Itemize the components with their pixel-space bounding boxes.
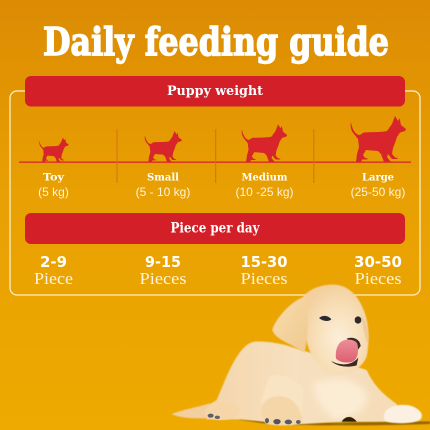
column: large [351,116,406,199]
amount: small: Pieces [140,269,186,288]
ear left [272,297,308,353]
column: medium: (10 -25 kg) [235,185,294,199]
column: small [136,131,190,199]
eye left [319,316,331,321]
amount: medium: 15-30 [240,253,288,271]
chest shading [313,378,367,420]
ground line [19,162,411,163]
icon: small dog [145,131,182,162]
heading: puppy weight: Puppy weight [167,84,263,99]
amount: toy [34,253,73,288]
column: toy [38,138,69,199]
illustration: puppy [172,285,430,425]
amount: small: 9-15 [145,253,181,271]
heading: piece per day: Piece per day [170,220,261,236]
amount: medium: Pieces [240,269,288,288]
shadow under belly [342,417,357,422]
column: small: (5 - 10 kg) [136,185,190,199]
amount: toy: Piece [34,269,73,288]
ground shadow [237,419,430,425]
column: small: Small [147,172,179,184]
icon: toy dog [39,138,69,162]
back paw [205,402,239,420]
amount: small [140,253,186,288]
nose [347,338,361,351]
column: medium: Medium [242,172,288,184]
icon: medium dog [242,124,287,162]
mouth [331,357,358,367]
eye right [355,316,361,324]
column dividers [116,129,314,183]
icon: large dog [351,116,406,162]
body [203,342,403,424]
column: toy: (5 kg) [38,185,69,199]
heading: piece per day [25,213,405,244]
tail [172,403,210,418]
panel: feeding chart [10,76,420,295]
column: toy: Toy [43,172,65,184]
tongue [336,340,358,362]
ear right [361,313,368,343]
heading: puppy weight [25,76,405,106]
amount: large: Pieces [354,269,402,288]
front leg and paw [261,375,303,425]
column: medium [235,124,294,199]
right paw [384,405,422,423]
column: large: (25-50 kg) [351,185,405,199]
amount: large [354,253,402,288]
amount: toy: 2-9 [40,253,67,271]
head [302,285,368,374]
amount: large: 30-50 [354,253,402,271]
column: large: Large [362,172,394,184]
amount: medium [240,253,288,288]
panel outline [10,91,420,295]
